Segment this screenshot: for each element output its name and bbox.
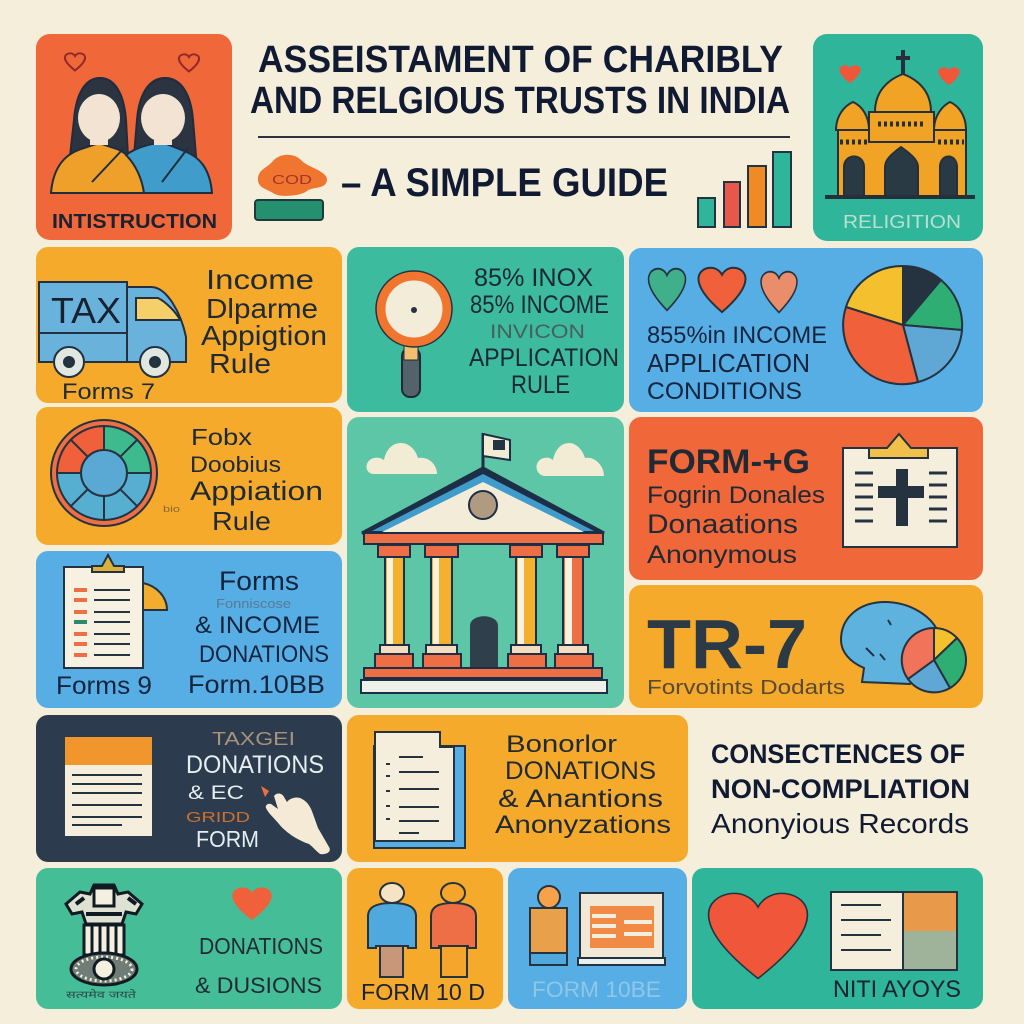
- icon: orange seal: [255, 155, 327, 220]
- chart: rising bars: [698, 152, 791, 227]
- icon: heart red: [698, 268, 746, 312]
- text: niti ayoys: NITI AYOYS: [833, 976, 961, 1003]
- text: forms 7: Forms 7: [62, 379, 155, 404]
- icon: heart green: [649, 269, 685, 310]
- icon: two women: [51, 78, 212, 193]
- text: 85 percent income: [469, 264, 619, 399]
- panel: 85 percent rule: [347, 247, 624, 412]
- text: conditions: 855%in INCOME: [647, 322, 827, 349]
- icon: big heart: [709, 893, 807, 978]
- text: form donations: FORM-+G: [647, 443, 810, 481]
- panel: application conditions: [629, 248, 983, 412]
- panel: heart records: [692, 868, 983, 1009]
- icon: heart peach: [761, 272, 797, 312]
- text: scribble: bio: [163, 504, 180, 514]
- panel: religious building: [813, 34, 983, 241]
- text: donations: DONATIONS: [199, 933, 323, 959]
- icon: state emblem: [66, 885, 142, 985]
- text: donations anonymizations: Anonyzations: [495, 811, 671, 839]
- text: donations: DONATIONS: [186, 751, 324, 779]
- panel: form 10 D: [347, 868, 503, 1009]
- text: donations anonymizations: Bonorlor: [506, 731, 617, 758]
- text: donations: FORM: [196, 826, 259, 852]
- text: application rule: Fobx: [191, 424, 253, 450]
- text: application rule: Rule: [212, 506, 271, 536]
- icon: monitor: [578, 893, 665, 965]
- panel: tax income: [36, 247, 342, 404]
- title: ASSEISTAMENT OF CHARIBLY: [258, 39, 783, 81]
- text: consequences: [711, 739, 970, 839]
- panel: forms income: [36, 551, 342, 708]
- panel: taxed donations form: [36, 715, 342, 862]
- icon: heart left: [65, 53, 85, 70]
- icon: clipboard cross: [843, 434, 957, 547]
- text: income donations: DONATIONS: [199, 641, 329, 668]
- text: income rule: Appigtion: [201, 320, 327, 351]
- text: 85 percent income: APPLICATION: [469, 344, 619, 372]
- icon: document list: [374, 732, 465, 848]
- icon: orange person: [431, 883, 476, 977]
- panel: donation anonymizations: [347, 715, 688, 862]
- text: 85 percent income: 85% INCOME: [470, 291, 609, 319]
- chart: pie: [843, 266, 962, 384]
- panel: institution: [36, 34, 232, 240]
- text: income donations: Form.10BB: [188, 671, 325, 699]
- text: income rule: Income: [206, 264, 314, 295]
- text: income rule: Rule: [209, 348, 271, 379]
- text: form 10BE: FORM 10BE: [532, 977, 661, 1002]
- panel: form 10BE: [508, 868, 687, 1009]
- text: 85 percent income: INVICON: [490, 322, 585, 343]
- icon: heart: [232, 888, 272, 920]
- text: form donations: Fogrin Donales: [647, 482, 825, 509]
- icon: heart left: [839, 65, 861, 83]
- panel: emblem donations: [36, 868, 342, 1009]
- icon: record document: [831, 892, 957, 970]
- text: emblem caption: सत्यमेव जयते: [66, 989, 136, 1001]
- icon: cloud left: [366, 443, 437, 474]
- icon: blue person: [368, 883, 416, 977]
- icon: tax truck: TAX: [51, 290, 121, 331]
- icon: tax truck: [39, 282, 186, 377]
- icon: document: [65, 737, 152, 836]
- icon: pointing hand: [261, 786, 330, 854]
- label: religion: RELIGITION: [843, 212, 961, 232]
- panel: center building: [347, 417, 624, 708]
- text: income donations: Forms: [219, 566, 299, 596]
- text: income donations: Fonniscose: [216, 596, 291, 611]
- label: institution: INTISTRUCTION: [52, 211, 217, 233]
- subtitle: – A SIMPLE GUIDE: [341, 161, 668, 205]
- text: consequences: CONSECTENCES OF: [711, 739, 965, 769]
- icon: heart right: [179, 54, 199, 71]
- chart: mini pie: [902, 628, 966, 692]
- title: [250, 39, 790, 122]
- text: donations: & DUSIONS: [195, 973, 322, 998]
- text: form 10 D: FORM 10 D: [361, 979, 485, 1005]
- icon: bank building: [361, 433, 607, 693]
- text: 85 percent income: RULE: [511, 371, 570, 399]
- icon: cloud right: [536, 443, 604, 476]
- icon: wheel: [51, 420, 157, 526]
- text: donations: & EC: [188, 783, 244, 804]
- text: form donations: [647, 443, 825, 569]
- icon: heart right: [938, 67, 960, 85]
- text: application rule: [190, 424, 323, 536]
- text: TR-7: TR-7: [647, 605, 807, 683]
- text: form donations: Donaations: [647, 509, 798, 539]
- text: donations anonymizations: DONATIONS: [505, 757, 656, 785]
- text: income rule: Dlparme: [206, 293, 318, 324]
- text: donations anonymizations: [495, 731, 671, 839]
- text: donations: GRIDD: [186, 809, 250, 826]
- text: conditions: CONDITIONS: [647, 378, 802, 405]
- text: donations: [195, 933, 323, 998]
- panel: fox donations: [36, 407, 342, 545]
- text: income donations: [188, 566, 329, 699]
- text: donations: [186, 729, 324, 852]
- text: forms 9: Forms 9: [56, 672, 152, 700]
- text: conditions: [647, 322, 827, 405]
- icon: checklist: [64, 555, 167, 668]
- panel: form 1-G: [629, 417, 983, 580]
- text: forvotints: Forvotints Dodarts: [647, 677, 845, 699]
- icon: person: [530, 886, 567, 965]
- text: conditions: APPLICATION: [647, 348, 810, 378]
- icon: speech bubble: [841, 602, 940, 684]
- text: donations: TAXGEI: [212, 729, 295, 749]
- text: income rule: [201, 264, 327, 379]
- text: application rule: Appiation: [190, 476, 323, 506]
- icon: orange seal: COD: [272, 172, 312, 187]
- text: donations anonymizations: & Anantions: [498, 785, 663, 813]
- icon: magnifier: [376, 271, 452, 397]
- icon: temple: [825, 50, 975, 197]
- text: 85 percent income: 85% INOX: [474, 264, 593, 292]
- panel: TR-7: [629, 585, 983, 708]
- title: AND RELGIOUS TRUSTS IN INDIA: [250, 80, 790, 122]
- text: income donations: & INCOME: [195, 612, 320, 639]
- text: application rule: Doobius: [190, 452, 281, 477]
- text: form donations: Anonymous: [647, 541, 797, 569]
- text: consequences: NON-COMPLIATION: [711, 774, 970, 804]
- text: consequences: Anonyious Records: [711, 808, 969, 839]
